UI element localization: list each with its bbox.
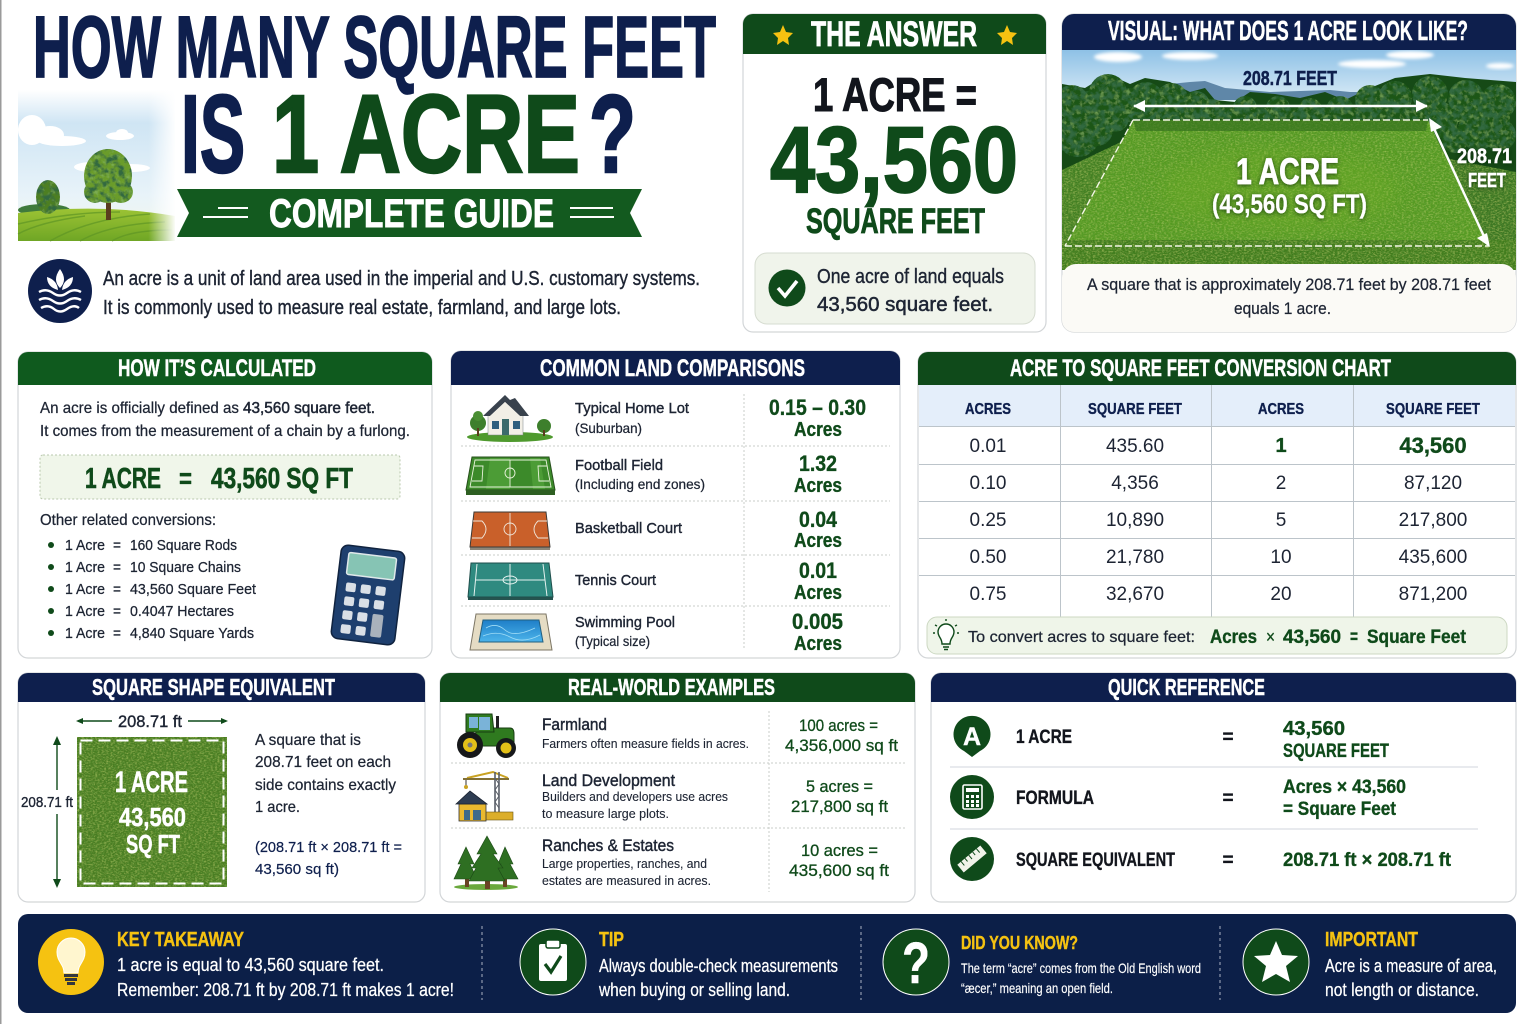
row: 1 acre: = bbox=[1222, 727, 1234, 748]
square description: side contains exactly bbox=[255, 777, 396, 794]
caption bbox=[1062, 264, 1516, 332]
heading bbox=[440, 673, 915, 702]
conversion table: 1 bbox=[1275, 435, 1287, 457]
related conversions list: 1 Acre bbox=[65, 559, 105, 576]
heading: SQUARE SHAPE EQUIVALENT bbox=[92, 674, 335, 700]
key takeaway: 1 acre is equal to 43,560 square feet. bbox=[117, 955, 384, 975]
row: swimming pool bbox=[470, 609, 843, 655]
key takeaway: Remember: 208.71 ft by 208.71 ft makes 1 acre! bbox=[117, 980, 454, 1000]
heading bbox=[451, 351, 900, 385]
panel: visual of one acre bbox=[1055, 14, 1516, 332]
row: land development: to measure large plots. bbox=[542, 806, 669, 821]
definition text: 43,560 square feet. bbox=[243, 400, 375, 417]
row: football field bbox=[466, 451, 842, 497]
row: swimming pool: Swimming Pool bbox=[575, 614, 675, 631]
did you know bbox=[883, 929, 1201, 996]
row: tennis court bbox=[468, 558, 842, 604]
conversion table: 435,600 bbox=[1399, 547, 1467, 568]
title: 1 ACRE bbox=[272, 73, 580, 196]
icon: A badge: A bbox=[963, 723, 981, 751]
conversion table: 10 bbox=[1270, 547, 1292, 568]
heading: REAL-WORLD EXAMPLES bbox=[568, 674, 775, 700]
row: farmland: 4,356,000 sq ft bbox=[785, 736, 898, 755]
row: formula: = bbox=[1222, 788, 1234, 809]
row: basketball court: 0.04 bbox=[799, 507, 838, 532]
row: square equivalent bbox=[950, 837, 1452, 881]
icon: pine trees bbox=[454, 836, 518, 890]
key takeaway: KEY TAKEAWAY bbox=[117, 929, 245, 951]
square diagram: 43,560 bbox=[119, 802, 186, 832]
row: typical home lot: (Suburban) bbox=[575, 420, 642, 436]
answer callout bbox=[755, 253, 1035, 324]
panel: bottom takeaways bbox=[18, 914, 1516, 1013]
row: land development: 5 acres = bbox=[806, 777, 873, 796]
icon: star bbox=[1243, 929, 1309, 995]
icon: football field bbox=[466, 457, 555, 495]
row: 1 acre: 43,560 bbox=[1283, 718, 1345, 740]
conversion table: 21,780 bbox=[1106, 547, 1164, 568]
icon: light bulb bbox=[933, 619, 959, 650]
row: land development bbox=[456, 771, 888, 821]
row: 1 acre: SQUARE FEET bbox=[1283, 741, 1389, 762]
row: football field: Football Field bbox=[575, 457, 663, 474]
row: ranches and estates: 10 acres = bbox=[801, 841, 878, 860]
conversion table: ACRES bbox=[1258, 401, 1304, 418]
related conversions list: = bbox=[113, 559, 121, 576]
square description: 43,560 sq ft) bbox=[255, 861, 339, 878]
related conversions list: 0.4047 Hectares bbox=[130, 603, 234, 620]
related conversions list: 1 Acre bbox=[65, 581, 105, 598]
related conversions list: 4,840 Square Yards bbox=[130, 625, 254, 642]
important: not length or distance. bbox=[1325, 980, 1479, 1000]
square diagram bbox=[21, 712, 228, 888]
conversion table: 0.25 bbox=[970, 510, 1006, 531]
conversion table: 4,356 bbox=[1111, 473, 1159, 494]
square diagram: SQ FT bbox=[126, 829, 180, 859]
definition text: An acre is officially defined as bbox=[40, 400, 239, 417]
row: swimming pool: (Typical size) bbox=[575, 633, 650, 649]
related conversions list: 1 Acre bbox=[65, 625, 105, 642]
related conversions list bbox=[40, 512, 257, 642]
related conversions list: = bbox=[113, 603, 121, 620]
row: typical home lot: Acres bbox=[794, 419, 842, 441]
conversion table bbox=[919, 385, 1515, 617]
caption: A square that is approximately 208.71 feet by 208.71 feet bbox=[1087, 275, 1491, 294]
row: square equivalent: = bbox=[1222, 850, 1234, 871]
intro text bbox=[103, 268, 700, 319]
conversion table: 43,560 bbox=[1399, 433, 1467, 458]
square diagram: 1 ACRE bbox=[115, 766, 188, 799]
related conversions list: = bbox=[113, 537, 121, 554]
conversion table: 0.75 bbox=[970, 584, 1006, 605]
icon: calculator bbox=[331, 544, 405, 646]
equation box: = bbox=[179, 463, 192, 495]
square diagram: 208.71 ft bbox=[21, 795, 73, 811]
row: football field: 1.32 bbox=[799, 451, 837, 476]
square description: A square that is bbox=[255, 732, 361, 749]
conversion table: 0.10 bbox=[970, 473, 1006, 494]
related conversions list: Other related conversions: bbox=[40, 512, 216, 529]
row: typical home lot bbox=[467, 395, 866, 442]
equation box: 1 ACRE bbox=[85, 463, 161, 495]
conversion table: 0.50 bbox=[970, 547, 1006, 568]
formula tip: = bbox=[1350, 627, 1358, 648]
icon: calculator badge bbox=[950, 775, 994, 819]
heading: COMMON LAND COMPARISONS bbox=[540, 355, 805, 382]
conversion table: 5 bbox=[1276, 510, 1286, 531]
row: farmland: 100 acres = bbox=[799, 716, 878, 735]
tip: TIP bbox=[599, 929, 624, 951]
definition text: It comes from the measurement of a chain by a furlong. bbox=[40, 423, 410, 440]
panel: the answer bbox=[743, 14, 1046, 332]
formula tip bbox=[927, 617, 1507, 654]
panel: square shape equivalent bbox=[18, 673, 425, 902]
row: ranches and estates: Ranches & Estates bbox=[542, 836, 674, 855]
formula tip: Square Feet bbox=[1367, 627, 1467, 648]
row: square equivalent: 208.71 ft × 208.71 ft bbox=[1283, 850, 1452, 871]
heading: QUICK REFERENCE bbox=[1108, 674, 1265, 700]
conversion table: 0.01 bbox=[970, 436, 1006, 457]
row: formula: FORMULA bbox=[1016, 788, 1094, 809]
icon: question mark: ? bbox=[902, 931, 930, 996]
conversion table: 217,800 bbox=[1399, 510, 1467, 531]
answer value: SQUARE FEET bbox=[806, 202, 985, 241]
definition text bbox=[40, 400, 410, 440]
tip: when buying or selling land. bbox=[598, 980, 790, 1000]
dimension labels: 208.71 FEET bbox=[1243, 68, 1337, 90]
square description bbox=[255, 732, 402, 878]
answer value bbox=[770, 68, 1018, 241]
illustration: landscape with trees bbox=[18, 88, 176, 243]
heading: HOW IT’S CALCULATED bbox=[118, 355, 316, 382]
dimension labels bbox=[1212, 68, 1512, 219]
caption: equals 1 acre. bbox=[1234, 299, 1331, 318]
heading bbox=[918, 352, 1516, 385]
row: typical home lot: Typical Home Lot bbox=[575, 400, 690, 417]
row: tennis court: Tennis Court bbox=[575, 572, 657, 589]
formula tip: To convert acres to square feet: bbox=[968, 629, 1195, 646]
did you know: The term “acre” comes from the Old English word bbox=[961, 960, 1201, 976]
equation box: 43,560 SQ FT bbox=[211, 463, 353, 495]
formula tip: Acres bbox=[1210, 627, 1257, 648]
formula tip: × bbox=[1266, 627, 1275, 647]
related conversions list: = bbox=[113, 625, 121, 642]
tip bbox=[520, 929, 838, 1000]
page edge bbox=[0, 0, 2, 1024]
row: formula: = Square Feet bbox=[1283, 799, 1397, 820]
icon: tennis court bbox=[468, 563, 553, 600]
square description: 208.71 feet on each bbox=[255, 754, 391, 771]
row: swimming pool: Acres bbox=[794, 633, 842, 655]
row: square equivalent: SQUARE EQUIVALENT bbox=[1016, 850, 1175, 871]
panel: conversion chart bbox=[918, 352, 1516, 658]
row: typical home lot: 0.15 – 0.30 bbox=[769, 395, 866, 420]
row: football field: Acres bbox=[794, 475, 842, 497]
title: HOW MANY SQUARE FEET bbox=[33, 0, 716, 96]
did you know: “æcer,” meaning an open field. bbox=[961, 980, 1113, 996]
heading bbox=[18, 352, 432, 385]
square diagram: 208.71 ft bbox=[118, 712, 182, 731]
square description: (208.71 ft × 208.71 ft = bbox=[255, 839, 402, 856]
conversion table: 2 bbox=[1276, 473, 1286, 494]
panel: quick reference bbox=[931, 673, 1516, 902]
row: ranches and estates: Large properties, ranches, and bbox=[542, 856, 707, 871]
row: basketball court: Basketball Court bbox=[575, 520, 683, 537]
square description: 1 acre. bbox=[255, 799, 300, 816]
conversion table: ACRES bbox=[965, 401, 1011, 418]
row: tennis court: Acres bbox=[794, 582, 842, 604]
row: basketball court bbox=[470, 507, 842, 552]
answer callout: One acre of land equals bbox=[817, 266, 1004, 288]
conversion table: 10,890 bbox=[1106, 510, 1164, 531]
dimension labels: 208.71 bbox=[1457, 145, 1512, 168]
formula tip: 43,560 bbox=[1283, 627, 1341, 648]
conversion table: 20 bbox=[1270, 584, 1292, 605]
important: Acre is a measure of area, bbox=[1325, 956, 1497, 976]
important: IMPORTANT bbox=[1325, 929, 1418, 951]
key takeaway bbox=[38, 929, 454, 1000]
answer callout: 43,560 square feet. bbox=[817, 294, 993, 316]
dimension labels: FEET bbox=[1468, 170, 1506, 192]
icon: basketball court bbox=[470, 512, 550, 550]
conversion table: 871,200 bbox=[1399, 584, 1467, 605]
row: ranches and estates: 435,600 sq ft bbox=[789, 861, 889, 880]
row: farmland: Farmland bbox=[542, 715, 607, 734]
title: IS bbox=[181, 73, 245, 196]
aerial field photo illustration bbox=[1055, 50, 1516, 270]
row: swimming pool: 0.005 bbox=[792, 609, 843, 634]
icon: ruler badge bbox=[950, 837, 994, 881]
panel: how it's calculated bbox=[18, 352, 432, 658]
answer header: THE ANSWER bbox=[811, 15, 977, 54]
icon: clipboard check bbox=[520, 929, 586, 995]
conversion table: SQUARE FEET bbox=[1386, 401, 1480, 418]
row: land development: Builders and developers use acres bbox=[542, 789, 728, 804]
icon: tractor bbox=[457, 714, 516, 758]
icon: swimming pool bbox=[470, 614, 552, 650]
row: farmland: Farmers often measure fields in acres. bbox=[542, 736, 749, 751]
did you know: DID YOU KNOW? bbox=[961, 933, 1078, 953]
related conversions list: 1 Acre bbox=[65, 537, 105, 554]
row: football field: (Including end zones) bbox=[575, 476, 705, 492]
conversion table: SQUARE FEET bbox=[1088, 401, 1182, 418]
conversion table: 87,120 bbox=[1404, 473, 1462, 494]
row: land development: 217,800 sq ft bbox=[791, 797, 888, 816]
related conversions list: 10 Square Chains bbox=[130, 559, 241, 576]
related conversions list: 160 Square Rods bbox=[130, 537, 237, 554]
banner: complete guide: COMPLETE GUIDE bbox=[269, 192, 554, 236]
related conversions list: = bbox=[113, 581, 121, 598]
answer value: 1 ACRE = bbox=[813, 68, 977, 121]
intro text: It is commonly used to measure real estate, farmland, and large lots. bbox=[103, 297, 621, 319]
row: tennis court: 0.01 bbox=[799, 558, 837, 583]
conversion table: 435.60 bbox=[1106, 436, 1164, 457]
related conversions list: 1 Acre bbox=[65, 603, 105, 620]
important bbox=[1243, 929, 1497, 1000]
row: basketball court: Acres bbox=[794, 530, 842, 552]
panel: common land comparisons bbox=[451, 351, 900, 658]
related conversions list: 43,560 Square Feet bbox=[130, 581, 257, 598]
row: 1 acre bbox=[953, 716, 1389, 762]
row: ranches and estates bbox=[454, 836, 889, 890]
title: ? bbox=[589, 73, 636, 196]
conversion table: 32,670 bbox=[1106, 584, 1164, 605]
row: formula: Acres × 43,560 bbox=[1283, 777, 1406, 798]
icon: house bbox=[467, 395, 553, 442]
intro text: An acre is a unit of land area used in the imperial and U.S. customary systems. bbox=[103, 268, 700, 290]
tip: Always double-check measurements bbox=[599, 956, 838, 976]
icon: A badge bbox=[953, 716, 991, 757]
row: farmland bbox=[457, 714, 898, 758]
heading bbox=[931, 673, 1516, 702]
dimension labels: 1 ACRE bbox=[1236, 151, 1339, 192]
row: land development: Land Development bbox=[542, 771, 675, 790]
dimension labels: (43,560 SQ FT) bbox=[1212, 189, 1367, 219]
icon: lightbulb bbox=[38, 929, 104, 995]
row: 1 acre: 1 ACRE bbox=[1016, 727, 1072, 748]
title bbox=[33, 0, 716, 196]
icon: question mark bbox=[883, 929, 949, 996]
answer value: 43,560 bbox=[770, 107, 1018, 212]
panel: real-world examples bbox=[440, 673, 915, 902]
equation box bbox=[40, 455, 400, 499]
row: ranches and estates: estates are measured in acres. bbox=[542, 873, 711, 888]
icon: crane and house bbox=[456, 772, 513, 821]
row: formula bbox=[950, 775, 1406, 820]
intro icon: leaves and water bbox=[28, 259, 92, 323]
